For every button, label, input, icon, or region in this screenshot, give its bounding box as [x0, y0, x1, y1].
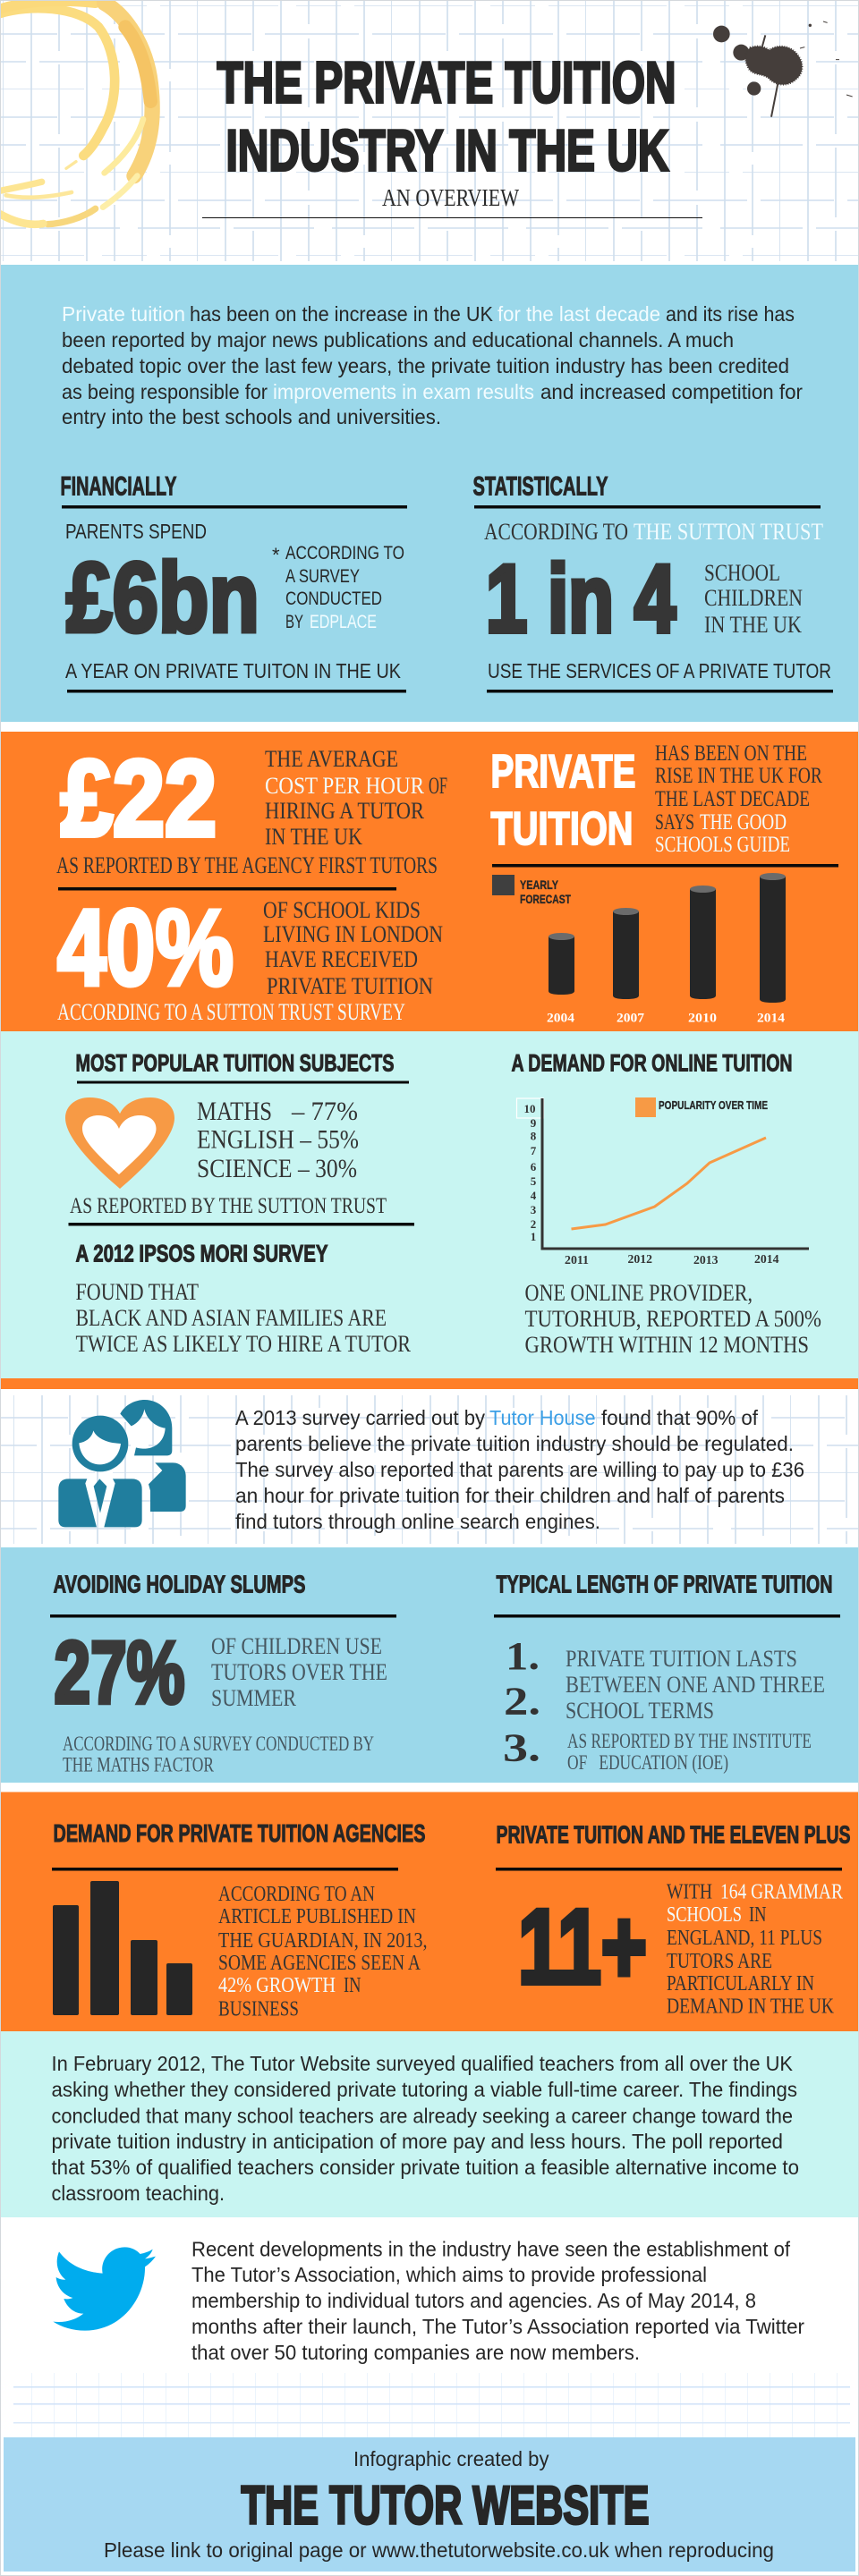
survey text [235, 1406, 804, 1533]
intro text [62, 302, 803, 428]
bar: 2004 [549, 933, 574, 995]
survey text: found that 90% of [601, 1406, 759, 1429]
rise text: HAS BEEN ON THE [655, 741, 807, 766]
panel: subjects and online demand: AS REPORTED BY THE SUTTON TRUST [70, 1194, 387, 1218]
survey note: CONDUCTED [285, 589, 382, 609]
heading: private tuition: PRIVATE [490, 746, 635, 798]
rise text [655, 741, 822, 857]
association paragraph: Recent developments in the industry have seen the establishment of [191, 2238, 791, 2261]
survey note: ACCORDING TO [285, 543, 404, 564]
survey text: an hour for private tuition for their children and half of parents [235, 1484, 785, 1507]
bar: 2010 [690, 886, 716, 999]
intro text: entry into the best schools and universities. [62, 405, 441, 428]
panel: agencies and eleven plus [0, 1792, 859, 2031]
maths factor note: ACCORDING TO A SURVEY CONDUCTED BY [63, 1733, 374, 1755]
year labels [547, 1011, 786, 1025]
intro text: debated topic over the last few years, the private tuition industry has been credited [62, 354, 789, 377]
intro text: for the last decade [498, 302, 660, 326]
year axis labels [565, 1253, 778, 1267]
cost per hour text: OF [429, 773, 447, 799]
heading: most popular subjects: MOST POPULAR TUITION SUBJECTS [75, 1050, 394, 1077]
ipsos mori text [75, 1279, 412, 1357]
survey paragraph: In February 2012, The Tutor Website surveyed qualified teachers from all over the UK [52, 2052, 794, 2075]
intro text: as being responsible for [62, 380, 268, 403]
survey note: EDPLACE [310, 612, 377, 632]
grammar schools text: PARTICULARLY IN [667, 1972, 814, 1996]
maths factor note: THE MATHS FACTOR [63, 1753, 214, 1776]
year axis labels: 2014 [754, 1253, 778, 1267]
grammar schools text: ENGLAND, 11 PLUS [667, 1927, 822, 1950]
ipsos mori text: BLACK AND ASIAN FAMILIES ARE [75, 1305, 387, 1331]
axis numbers: 6 [531, 1160, 537, 1174]
heading: statistically: STATISTICALLY [472, 472, 608, 501]
panel: financially [61, 472, 407, 692]
cost per hour text: THE AVERAGE [265, 746, 398, 772]
year labels: 2007 [617, 1011, 645, 1025]
panel: statistically [472, 472, 833, 692]
title [217, 50, 676, 182]
icon: ink splat [713, 21, 853, 117]
legend: popularity [635, 1097, 768, 1117]
school kids text: PRIVATE TUITION [267, 973, 433, 999]
subtitle: AN OVERVIEW [382, 184, 519, 211]
association paragraph [191, 2238, 804, 2364]
survey text: parents believe the private tuition industry should be regulated. [235, 1432, 794, 1455]
guardian text: THE GUARDIAN, IN 2013, [218, 1929, 428, 1953]
intro text: and increased competition for [540, 380, 803, 403]
tuition length text [566, 1646, 825, 1774]
school kids text: LIVING IN LONDON [263, 921, 443, 947]
stat: 1 in 4: 1 in 4 [486, 545, 676, 652]
school kids text [263, 897, 443, 999]
credit line: Infographic created by [353, 2447, 549, 2470]
year labels: 2004 [547, 1011, 575, 1025]
grammar schools text: SCHOOLS [667, 1903, 742, 1927]
guardian text: IN [344, 1974, 361, 1997]
legend: yearly forecast: FORECAST [520, 892, 571, 906]
summer text: OF CHILDREN USE [211, 1633, 382, 1659]
heading: financially: FINANCIALLY [61, 472, 177, 501]
bar: 2007 [613, 908, 639, 999]
association paragraph: The Tutor’s Association, which aims to provide professional [191, 2263, 707, 2286]
association paragraph: months after their launch, The Tutor’s Association reported via Twitter [191, 2315, 804, 2338]
orange divider [0, 1378, 859, 1389]
subject percentages: – 77% [291, 1097, 358, 1126]
school children note: IN THE UK [704, 612, 802, 638]
subject percentages: MATHS [197, 1097, 272, 1126]
school children note: SCHOOL [704, 560, 780, 586]
cost per hour text: HIRING A TUTOR [265, 798, 425, 824]
numbered markers: 2. [504, 1680, 540, 1723]
panel: costs and forecast: ACCORDING TO A SUTTON TRUST SURVEY [57, 999, 405, 1025]
axis numbers: 3 [531, 1203, 537, 1216]
stat: 6bn: £6bn [66, 543, 259, 653]
intro text: and its rise has [666, 302, 795, 326]
survey text: find tutors through online search engines. [235, 1510, 600, 1533]
intro text: has been on the increase in the UK [190, 302, 494, 326]
axis numbers: 5 [531, 1174, 537, 1188]
stat: 11 plus: 11+ [518, 1888, 647, 2006]
panel: subjects and online demand [0, 1031, 859, 1378]
panel: financially: A YEAR ON PRIVATE TUITON IN THE UK [65, 659, 402, 682]
guardian text: ARTICLE PUBLISHED IN [218, 1905, 416, 1928]
rise text: SAYS [655, 810, 694, 835]
numbered markers: 3. [503, 1726, 540, 1770]
heading: private tuition: TUITION [490, 803, 634, 855]
heading: ipsos mori: A 2012 IPSOS MORI SURVEY [75, 1240, 327, 1267]
panel: tutor house survey [0, 1389, 859, 1547]
guardian text: SOME AGENCIES SEEN A [218, 1952, 421, 1975]
reproduction note: Please link to original page or www.thetutorwebsite.co.uk when reproducing [104, 2538, 774, 2562]
subject percentages [197, 1097, 359, 1183]
axis numbers: 10 [524, 1102, 535, 1115]
panel: footer [4, 2437, 855, 2572]
legend: yearly forecast: YEARLY [520, 877, 559, 892]
line: popularity [571, 1138, 766, 1229]
cost per hour text: COST PER HOUR [265, 773, 425, 799]
stat: 27 percent: 27% [54, 1623, 184, 1721]
cost per hour text [265, 746, 447, 850]
summer text: SUMMER [211, 1685, 297, 1711]
rise text: THE GOOD [700, 810, 787, 835]
heading: holiday slumps: AVOIDING HOLIDAY SLUMPS [54, 1571, 306, 1597]
icon: tutor and parent [58, 1400, 186, 1527]
subject percentages: SCIENCE – 30% [197, 1154, 357, 1183]
year axis labels: 2013 [693, 1254, 718, 1267]
survey paragraph: asking whether they considered private tutoring a viable full-time career. The findings [52, 2078, 797, 2101]
online provider text: ONE ONLINE PROVIDER, [524, 1280, 753, 1306]
bar: 2014 [760, 873, 786, 1003]
association paragraph: that over 50 tutoring companies are now members. [191, 2341, 640, 2364]
grammar schools text: IN [749, 1903, 766, 1927]
panel: costs and forecast [0, 732, 859, 1031]
year labels: 2014 [757, 1011, 786, 1025]
intro text: Private tuition [62, 302, 185, 326]
online provider text: GROWTH WITHIN 12 MONTHS [524, 1332, 809, 1358]
heading: private tuition [490, 746, 635, 855]
year axis labels: 2011 [565, 1254, 589, 1267]
panel: financially: PARENTS SPEND [65, 520, 207, 543]
survey note [272, 543, 404, 632]
tuition length text: SCHOOL TERMS [566, 1698, 714, 1724]
intro text: improvements in exam results [273, 380, 534, 403]
guardian text: ACCORDING TO AN [218, 1883, 375, 1906]
guardian text [218, 1883, 428, 2021]
stat: 22 pounds: £22 [61, 737, 217, 859]
maths factor note [63, 1733, 374, 1776]
school kids text: HAVE RECEIVED [265, 946, 418, 972]
school kids text: OF SCHOOL KIDS [263, 897, 421, 923]
panel: holiday slumps and length [0, 1547, 859, 1783]
tuition length text: OF EDUCATION (IOE) [567, 1751, 728, 1774]
numbered markers [503, 1634, 540, 1770]
rise text: THE LAST DECADE [655, 787, 810, 811]
survey paragraph: classroom teaching. [52, 2182, 225, 2205]
year labels: 2010 [688, 1011, 717, 1025]
survey text: A 2013 survey carried out by [235, 1406, 485, 1429]
axis numbers: 4 [531, 1189, 537, 1202]
survey paragraph: private tuition industry in anticipation of more pay and less hours. The poll reported [52, 2130, 783, 2153]
grammar schools text: TUTORS ARE [667, 1950, 772, 1973]
rise text: SCHOOLS GUIDE [655, 833, 790, 857]
icon: heart [65, 1097, 174, 1189]
heading: demand for agencies: DEMAND FOR PRIVATE TUITION AGENCIES [54, 1819, 426, 1847]
intro text: been reported by major news publications and educational channels. A much [62, 328, 734, 352]
axis numbers: 9 [531, 1116, 537, 1130]
ipsos mori text: TWICE AS LIKELY TO HIRE A TUTOR [75, 1331, 412, 1357]
stat: 40 percent: 40% [57, 886, 234, 1008]
subject percentages: ENGLISH – 55% [197, 1125, 359, 1154]
year axis labels: 2012 [628, 1253, 652, 1267]
online provider text [524, 1280, 821, 1358]
axis numbers: 8 [531, 1129, 537, 1143]
association paragraph: membership to individual tutors and agencies. As of May 2014, 8 [191, 2289, 756, 2312]
axis numbers: 1 [531, 1230, 536, 1243]
panel: statistically: THE SUTTON TRUST [634, 519, 823, 545]
survey paragraph: that 53% of qualified teachers consider private tuition a feasible alternative income to [52, 2156, 799, 2179]
summer text [211, 1633, 387, 1711]
title: INDUSTRY IN THE UK [225, 118, 669, 182]
axis numbers [524, 1102, 537, 1243]
school children note: CHILDREN [704, 585, 803, 611]
survey text: Tutor House [489, 1406, 596, 1429]
chart: yearly forecast cylinders [492, 873, 786, 1025]
tuition length text: BETWEEN ONE AND THREE [566, 1672, 825, 1698]
survey note: BY [285, 612, 303, 632]
survey text: The survey also reported that parents are willing to pay up to £36 [235, 1458, 804, 1481]
guardian text: BUSINESS [218, 1998, 299, 2021]
chart: agency bars [53, 1881, 192, 2015]
panel: tutor website survey [0, 2031, 859, 2217]
panel: introduction and headline statistics [0, 265, 859, 722]
axis numbers: 2 [531, 1217, 536, 1231]
guardian text: 42% GROWTH [218, 1974, 336, 1997]
tuition length text: PRIVATE TUITION LASTS [566, 1646, 797, 1672]
legend: popularity: POPULARITY OVER TIME [659, 1098, 768, 1112]
summer text: TUTORS OVER THE [211, 1659, 387, 1685]
grammar schools text: WITH [667, 1881, 712, 1904]
panel: header [0, 0, 859, 265]
survey note: A SURVEY [285, 566, 360, 587]
cost per hour text: IN THE UK [265, 824, 362, 850]
axis numbers: 7 [531, 1144, 537, 1157]
panel: tutors association [0, 2217, 859, 2437]
survey note: * [272, 544, 280, 566]
ipsos mori text: FOUND THAT [75, 1279, 199, 1305]
chart: popularity over time [517, 1097, 809, 1267]
online provider text: TUTORHUB, REPORTED A 500% [524, 1306, 821, 1332]
panel: costs and forecast: AS REPORTED BY THE AGENCY FIRST TUTORS [56, 852, 438, 878]
survey paragraph: concluded that many school teachers are already seeking a career change toward the [52, 2104, 793, 2127]
panel: statistically: ACCORDING TO [484, 519, 628, 545]
numbered markers: 1. [506, 1634, 540, 1678]
school children note [704, 560, 803, 638]
survey paragraph [52, 2052, 799, 2205]
icon: twitter bird [53, 2247, 156, 2331]
icon: coffee ring stain [0, 1, 152, 225]
footer logo: THE TUTOR WEBSITE [242, 2476, 650, 2535]
grammar schools text [667, 1881, 843, 2019]
title: THE PRIVATE TUITION [217, 50, 676, 114]
legend: yearly forecast [492, 875, 571, 906]
